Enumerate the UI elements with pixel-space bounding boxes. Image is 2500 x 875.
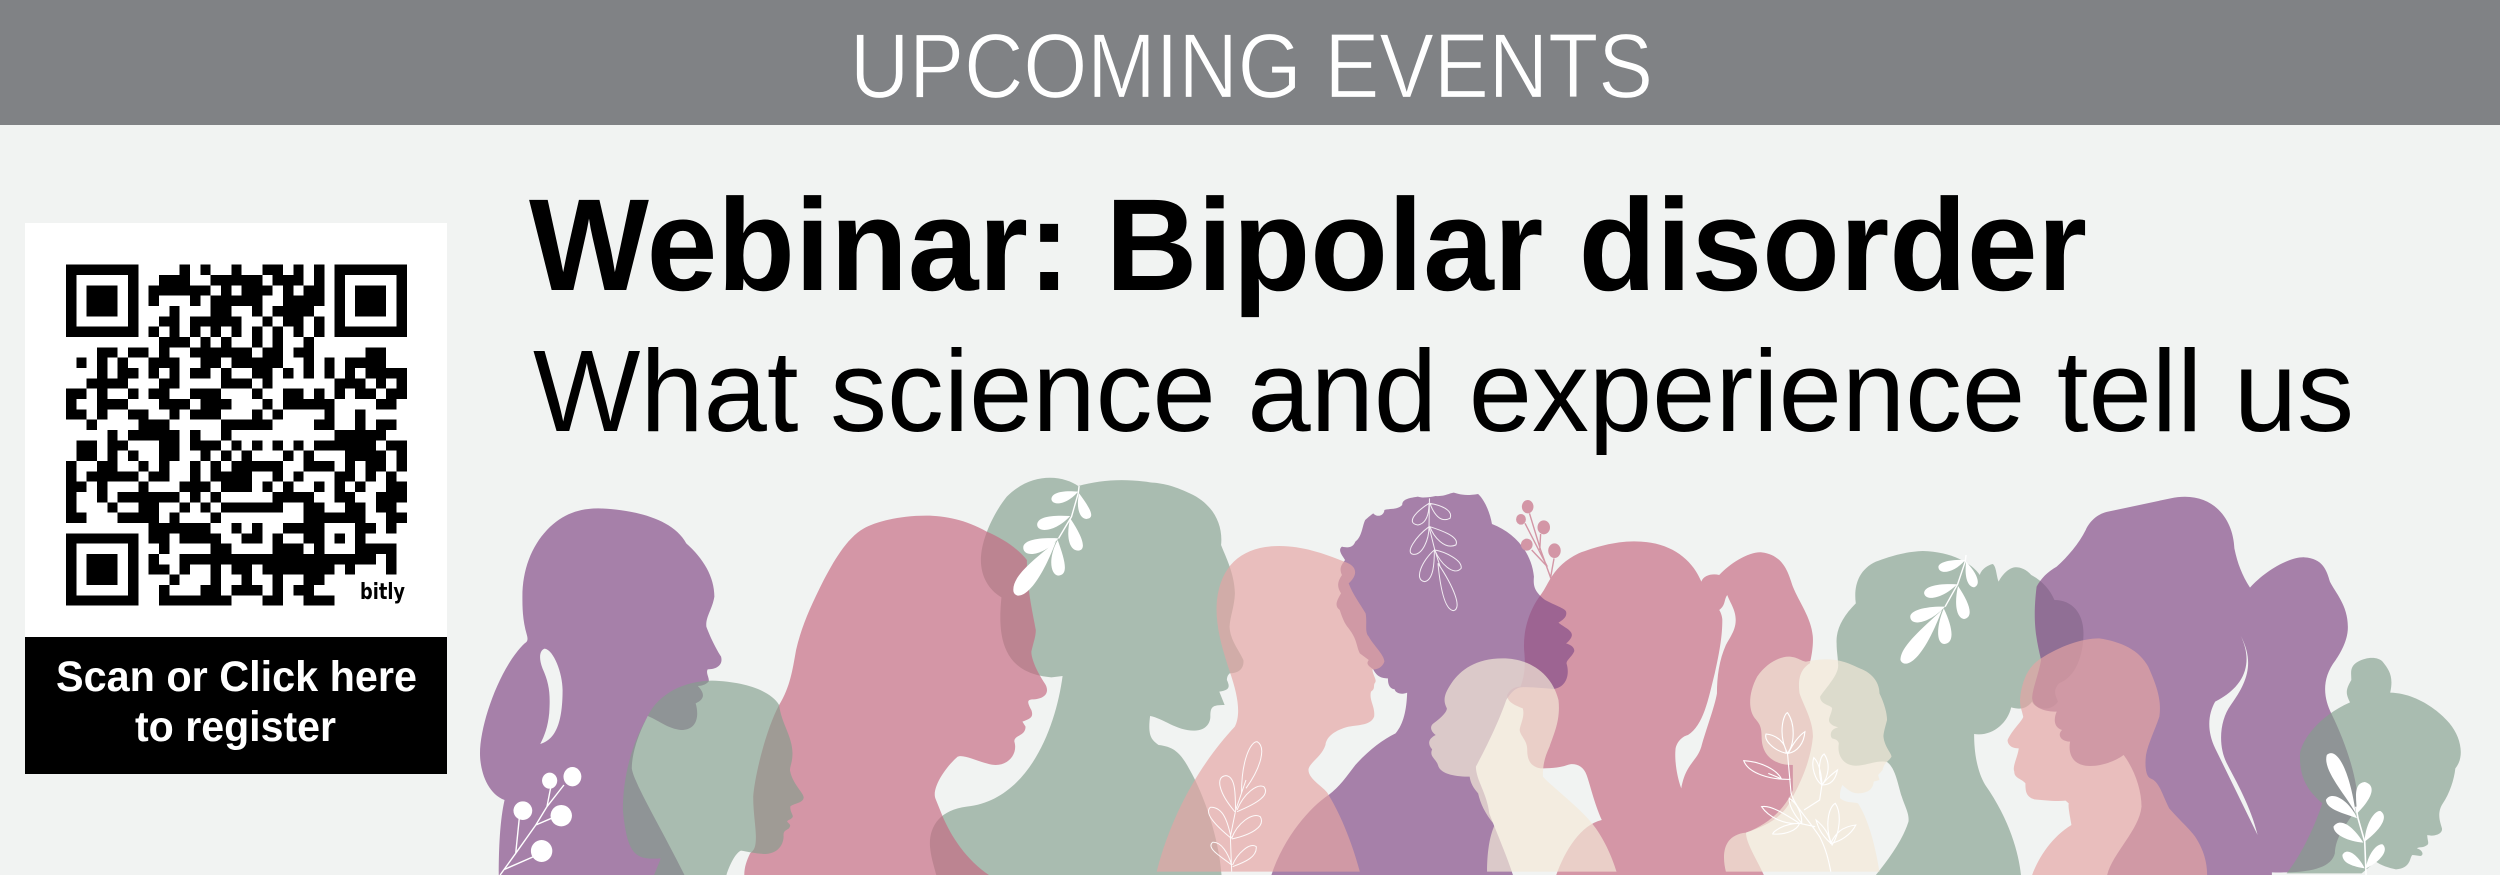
- icon: white leaves on sage woman: [1013, 486, 1091, 596]
- silhouette: pink woman with ponytail: [1507, 541, 1813, 875]
- panel: QR code registration card: [25, 223, 447, 774]
- silhouette: sage figure with bun: [2287, 658, 2461, 873]
- silhouette: cream figure center: [1429, 658, 1617, 872]
- call to action text: to register: [135, 703, 336, 751]
- call to action box: [25, 637, 447, 774]
- bitly logo: bitly: [360, 580, 405, 605]
- silhouette: sage woman right with leaf: [1820, 551, 2083, 875]
- icon: white berry branch: [500, 767, 581, 875]
- silhouette: purple woman curly hair: [1271, 493, 1574, 875]
- icon: white outline leaves on curly hair: [1410, 498, 1461, 611]
- icon: white outline plant on light pink figure: [1208, 742, 1266, 872]
- silhouette: light pink figure right: [2008, 638, 2207, 875]
- illustration: silhouettes of people: [480, 478, 2461, 875]
- heading: upcoming events: UPCOMING EVENTS: [850, 16, 1653, 118]
- subtitle: What science and experience tell us: [533, 326, 2354, 456]
- silhouette: purple woman right big hair: [2032, 497, 2358, 875]
- icon: white leaves on sage woman right: [1900, 555, 1978, 664]
- icon: pink berry branch: [1516, 500, 1561, 578]
- silhouette: pink woman long hair: [744, 516, 1047, 875]
- header band: [0, 0, 2500, 125]
- call to action text: Scan or Click here: [56, 653, 417, 701]
- icon: white outline plant on cream figure: [1744, 713, 1856, 872]
- title: Webinar: Bipolar disorder: [529, 171, 2087, 318]
- silhouette: cream figure right: [1724, 657, 1892, 872]
- silhouette: sage woman with leaf: [930, 478, 1243, 875]
- silhouette: purple woman left: [480, 508, 722, 875]
- icon: white leaves on bun figure: [2326, 753, 2385, 875]
- QR code: [66, 270, 407, 600]
- silhouette: light pink figure: [1157, 546, 1384, 872]
- silhouette: small sage figure: [623, 681, 804, 875]
